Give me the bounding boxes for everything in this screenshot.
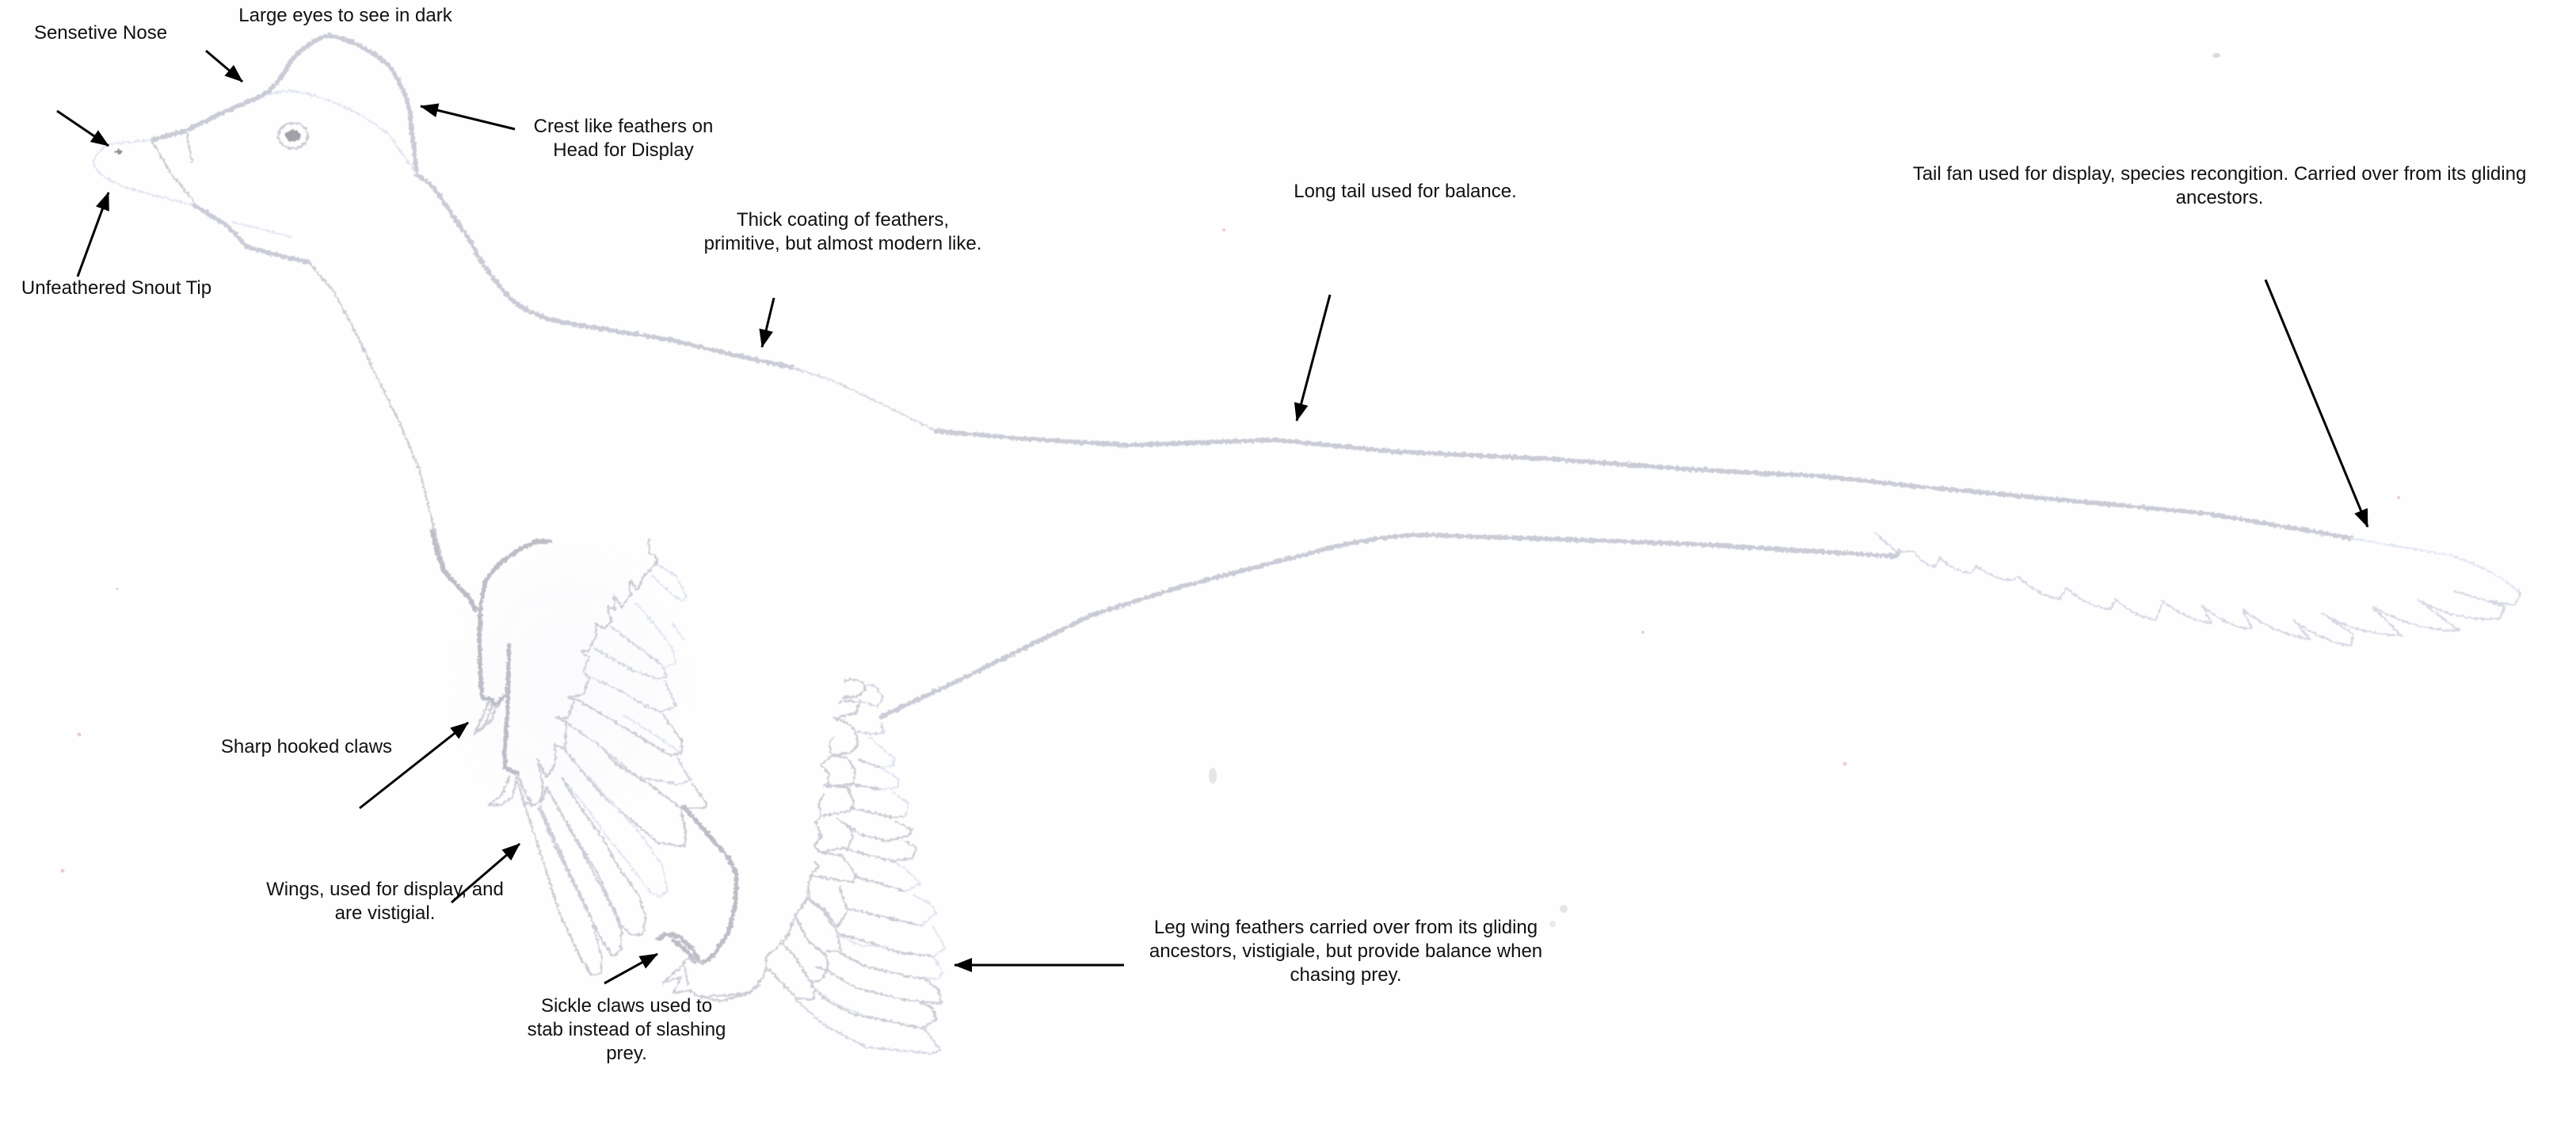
head and neck [93, 36, 792, 570]
face lines [232, 91, 417, 236]
upper wing feathers [565, 564, 707, 846]
hooked claw upper [474, 703, 497, 734]
arrow: nose [57, 111, 109, 146]
sickle claw [657, 934, 699, 961]
label: long tail: Long tail used for balance. [1294, 181, 1517, 202]
label: wings: Wings, used for display, and [266, 879, 504, 900]
tail underside and thigh [881, 535, 1900, 717]
snout [93, 140, 195, 205]
tail top outline [792, 368, 2519, 593]
arrow: sickle claw [604, 954, 657, 983]
arrow: crest [421, 106, 515, 129]
label: wings: are vistigial. [335, 902, 435, 924]
lower jaw and throat [151, 140, 195, 202]
arrow: eyes [206, 51, 242, 82]
label: sickle claws: Sickle claws used to [541, 995, 712, 1017]
label: sensitive nose: Sensetive Nose [34, 22, 167, 44]
label: leg wing feathers: Leg wing feathers carried over from its gliding [1154, 917, 1538, 938]
long primary feathers [517, 776, 668, 975]
label: thick coating of feathers: primitive, but almost modern like. [704, 233, 981, 254]
label: unfeathered snout tip: Unfeathered Snout Tip [21, 277, 211, 299]
label: thick coating of feathers: Thick coating of feathers, [737, 209, 949, 231]
arrow: thick coating [762, 298, 774, 347]
throat outline [195, 205, 308, 262]
arrow: snout tip [78, 193, 109, 277]
label: sharp hooked claws: Sharp hooked claws [221, 736, 392, 757]
label: crest feathers: Head for Display [553, 139, 694, 161]
label: sickle claws: prey. [606, 1043, 647, 1064]
front of neck [308, 262, 444, 570]
arrow: wings [452, 844, 520, 902]
label: large eyes: Large eyes to see in dark [238, 5, 453, 26]
arrow: long tail [1297, 295, 1330, 421]
hip, sickle claw and foot [657, 807, 760, 1001]
leg lower feathers and foot edge [711, 898, 945, 1054]
mouth tick [187, 134, 192, 162]
nostril [115, 149, 122, 155]
crest and back of neck outline [151, 36, 792, 368]
shoulder shading [467, 563, 673, 800]
tail fan feathers [1875, 532, 2520, 646]
wing [432, 531, 707, 846]
neck to shoulder [432, 531, 475, 609]
label: tail fan: Tail fan used for display, species recongition. Carried over from its gliding [1913, 163, 2526, 185]
foot tangle [663, 959, 760, 1001]
inner arm [505, 646, 517, 774]
paper speckles [60, 53, 2400, 927]
leg upper feathers [808, 679, 936, 927]
hip outline [684, 807, 737, 963]
eye [278, 123, 307, 148]
label: crest feathers: Crest like feathers on [534, 116, 713, 137]
label: leg wing feathers: ancestors, vistigiale, but provide balance when [1149, 941, 1542, 962]
scalloped wing edge [517, 539, 657, 806]
arrow: leg feathers [955, 963, 1124, 967]
label: leg wing feathers: chasing prey. [1290, 964, 1401, 986]
arrow: hooked claws [360, 723, 468, 808]
hooked claw lower [489, 775, 517, 806]
label: tail fan: ancestors. [2176, 187, 2263, 208]
shoulder arc and arm [479, 541, 551, 705]
label: sickle claws: stab instead of slashing [528, 1019, 726, 1040]
arrow: tail fan [2265, 280, 2368, 527]
